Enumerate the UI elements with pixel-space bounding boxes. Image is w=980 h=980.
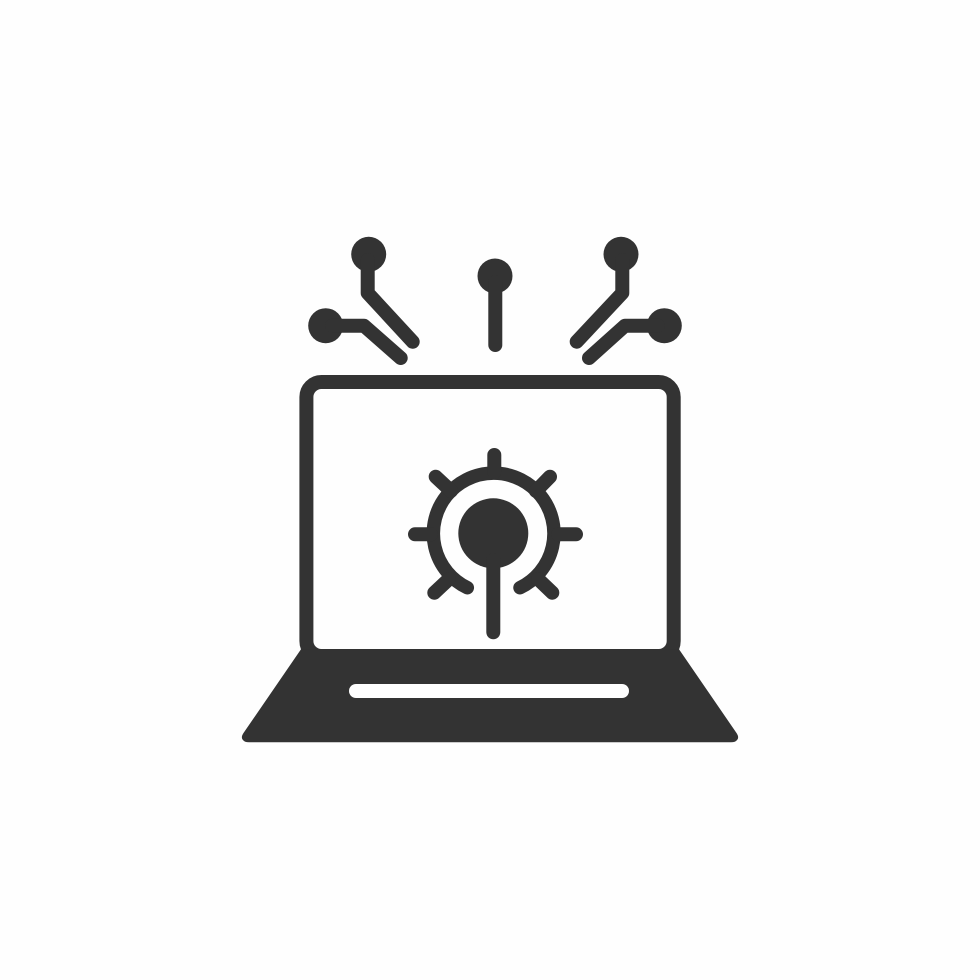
gear center hub <box>458 498 528 568</box>
circuit nodes above laptop <box>308 237 682 358</box>
laptop trackpad slot <box>349 684 629 698</box>
node: upper left <box>351 237 413 342</box>
gear stem <box>486 560 500 632</box>
gear icon on screen <box>415 455 576 632</box>
laptop keyboard base <box>242 649 738 742</box>
node: center <box>478 258 512 345</box>
node: lower left <box>308 308 401 358</box>
laptop screen frame <box>306 382 674 656</box>
gear ring <box>433 473 554 588</box>
node: upper right <box>577 237 638 342</box>
gear spokes <box>415 455 576 593</box>
node: lower right <box>589 308 682 358</box>
